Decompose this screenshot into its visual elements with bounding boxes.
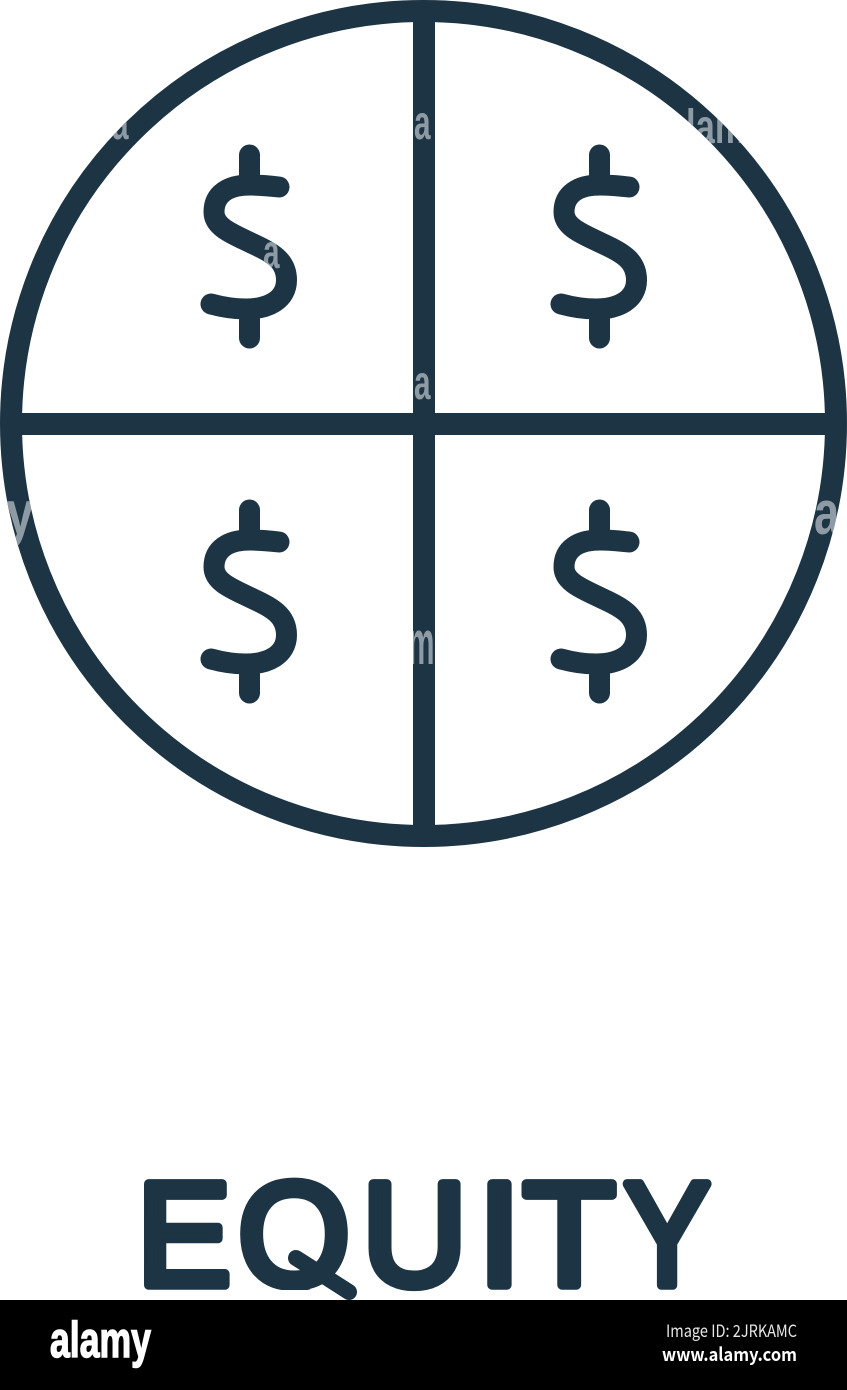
title: U xyxy=(362,1152,467,1316)
alamy logo: alamy xyxy=(50,1312,151,1368)
icon: dollar sign bottom right xyxy=(561,510,636,693)
watermark fragments: a xyxy=(414,97,431,150)
watermark fragments: a xyxy=(263,226,280,279)
watermark fragments: a xyxy=(814,478,840,548)
footer bar xyxy=(0,1300,847,1390)
title: I xyxy=(478,1152,521,1316)
watermark fragments: m xyxy=(408,609,434,678)
watermark fragments: lam xyxy=(686,99,746,153)
website: www.alamy.com xyxy=(662,1341,797,1367)
icon: dollar sign top left xyxy=(211,155,286,338)
image id: Image ID: 2JRKAMC xyxy=(666,1317,797,1342)
watermark fragments xyxy=(6,97,840,678)
title: T xyxy=(523,1152,615,1317)
title xyxy=(144,1178,712,1300)
watermark fragments: a xyxy=(414,357,431,410)
watermark fragments: y xyxy=(6,479,34,548)
icon: dollar sign bottom left xyxy=(211,510,286,693)
title: E xyxy=(137,1152,231,1317)
title: Y xyxy=(624,1153,710,1317)
title: Q xyxy=(238,1152,350,1316)
icon: equity pie circle xyxy=(11,11,836,836)
watermark fragments: a xyxy=(112,97,129,150)
icon: dollar sign top right xyxy=(561,155,636,338)
